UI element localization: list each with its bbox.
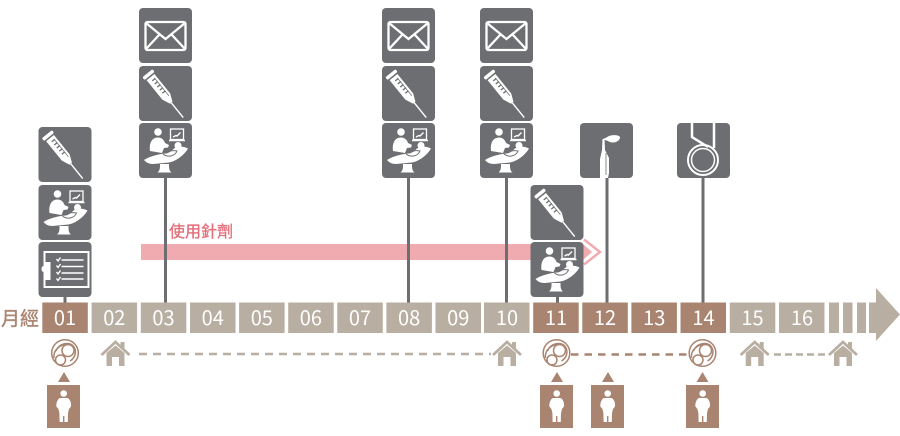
day 12: 12 (594, 302, 616, 331)
day 13 (631, 302, 677, 333)
day 06: 06 (300, 302, 322, 331)
day 12 (582, 302, 628, 333)
timeline arrowhead (829, 288, 900, 341)
icon: follicle 01 (52, 340, 78, 366)
column 10 icons (480, 8, 533, 178)
column 11 icons (530, 185, 584, 297)
icon: follicle 11 (543, 340, 570, 366)
icon: ultrasound chair (139, 123, 192, 178)
dashed line: home 15 to 16 (774, 353, 826, 356)
day 02 (92, 302, 137, 333)
day 06 (288, 302, 334, 333)
icon: ultrasound chair (530, 242, 584, 297)
re-draw stem over bar (166, 178, 506, 302)
icon: envelope (480, 8, 533, 63)
day 16 (779, 302, 824, 333)
icon: ultrasound chair (480, 123, 533, 178)
day 03 (141, 302, 186, 333)
day 03: 03 (152, 302, 175, 331)
icon: person 12 (591, 385, 624, 428)
day 04 (190, 302, 236, 333)
icon: home 02 (102, 342, 130, 366)
icon: person 01 (47, 385, 80, 428)
day 05: 05 (251, 302, 273, 331)
icon: envelope (139, 8, 192, 63)
day 07 (337, 302, 383, 333)
day 09 (436, 302, 481, 333)
day 01: 01 (54, 302, 76, 331)
column 01 icons (38, 127, 92, 297)
day 15 (730, 302, 775, 333)
day 10 (484, 302, 530, 333)
icon: envelope (382, 8, 435, 63)
day 14 (680, 302, 726, 333)
dashed line: follicle 11 to 14 (571, 353, 690, 356)
day 09: 09 (447, 302, 469, 331)
icon: syringe (38, 127, 92, 183)
icon: home 15 (741, 342, 769, 366)
label: using needle: 使用針劑 (169, 223, 233, 241)
icon: syringe (382, 66, 435, 122)
icon: person 14 (686, 385, 719, 428)
icon: ultrasound chair (38, 185, 92, 240)
day 08: 08 (398, 302, 420, 331)
day 05 (239, 302, 285, 333)
day 11 (533, 302, 579, 333)
column 08 icons (382, 8, 435, 178)
day 16: 16 (791, 302, 813, 331)
day 07: 07 (349, 302, 371, 331)
timeline cells (42, 302, 825, 333)
icon: home 10 (493, 342, 521, 366)
day 08 (386, 302, 432, 333)
icon: home 16 (829, 342, 857, 366)
stem lines (65, 175, 703, 303)
day 14: 14 (692, 302, 715, 331)
icon: person 11 (540, 385, 573, 428)
triangles (58, 372, 708, 382)
icon: syringe (530, 185, 584, 241)
icon: clipboard (38, 242, 92, 297)
day 10: 10 (496, 302, 518, 331)
day 15: 15 (741, 302, 764, 331)
day 13: 13 (643, 302, 665, 331)
icon: syringe (480, 66, 533, 122)
day 11: 11 (545, 302, 567, 331)
day 01 (42, 302, 88, 333)
icon: follicle 14 (689, 340, 716, 366)
icon: trigger needle (580, 123, 633, 178)
pink arrow bar (141, 240, 600, 264)
day 04: 04 (202, 302, 224, 331)
dashed line: home 02 to 10 (139, 353, 491, 355)
icon: syringe (139, 66, 192, 122)
column 03 icons (139, 8, 192, 178)
icon: ultrasound chair (382, 123, 435, 178)
day 02: 02 (103, 302, 125, 331)
period label: 月經 (1, 308, 39, 330)
icon: ring embryo transfer (677, 123, 730, 178)
